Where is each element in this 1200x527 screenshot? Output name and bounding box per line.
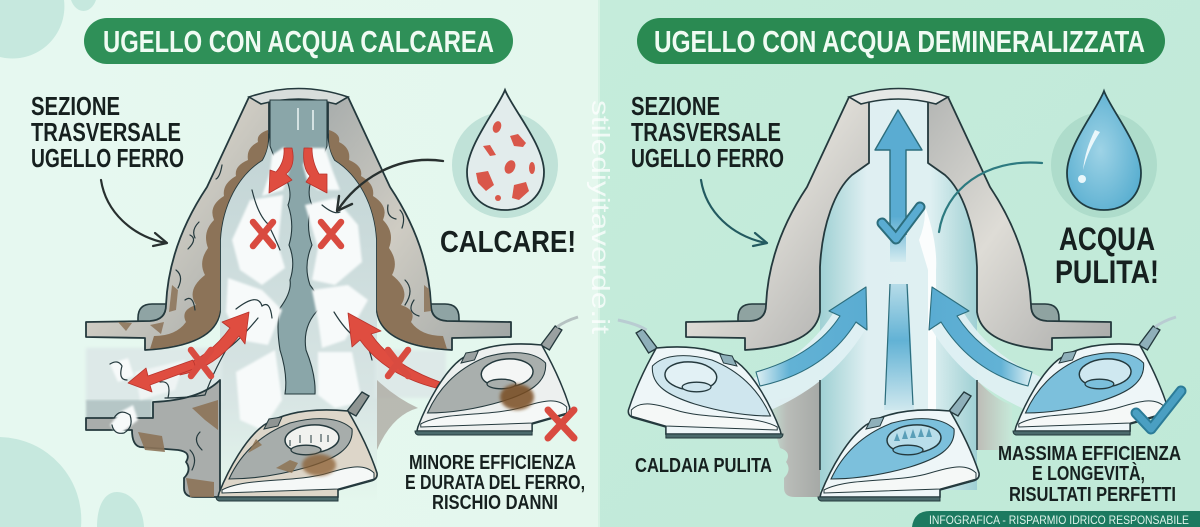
chamber with limescale (220, 100, 377, 500)
text: massima efficienza (998, 443, 1181, 506)
rust deposits left (150, 130, 268, 349)
arrow: right flow (929, 287, 1032, 386)
text: minore efficienza: MINORE EFFICIENZA (409, 452, 576, 474)
shoulders (138, 304, 459, 322)
label: calcare: CALCARE! (440, 224, 576, 259)
panel: acqua demineralizzata background (600, 0, 1200, 527)
watermark: stilediyitaverde.it (586, 100, 614, 334)
lower right wall (377, 380, 418, 450)
limescale cracks (110, 165, 419, 470)
text: minore efficienza (405, 452, 585, 514)
icon: limescale water drop (452, 90, 558, 218)
text: massima efficienza: E LONGEVITÀ, (1032, 462, 1145, 485)
lower bar edges (885, 284, 913, 405)
side channels (86, 348, 446, 402)
label: sezione trasversale destra: SEZIONE (631, 91, 720, 121)
wall lines (820, 380, 977, 470)
arrow: drop to limescale (337, 160, 443, 211)
label: sezione trasversale destra: TRASVERSALE (631, 117, 781, 147)
label: acqua pulita: PULITA! (1055, 254, 1159, 290)
arrow: sezione to nozzle right (701, 180, 767, 246)
lower left wall (765, 380, 820, 497)
nozzle left body (686, 97, 869, 350)
heading: ugello con acqua calcarea: UGELLO CON ACQUA CALCAREA (103, 24, 494, 59)
iron: left panel rusted right (415, 317, 578, 435)
nozzle diagram: acqua calcarea (86, 88, 511, 500)
nozzle diagram: acqua demineralizzata (686, 88, 1111, 497)
label: sezione trasversale sinistra: UGELLO FERRO (31, 143, 184, 173)
icon: clean water drop (1051, 91, 1157, 218)
nozzle cap (849, 88, 948, 104)
rust deposits right (329, 130, 447, 349)
icon: blue check (1136, 391, 1181, 429)
iron: right panel clean left (618, 320, 783, 438)
text: minore efficienza: RISCHIO DANNI (432, 492, 558, 514)
icon: red cross (548, 410, 574, 438)
arrow: sezione to nozzle left (101, 180, 167, 246)
heading: ugello con acqua calcarea (84, 18, 513, 64)
iron: right panel clean right (1013, 317, 1176, 435)
neck highlights (298, 108, 313, 130)
label: sezione trasversale destra: UGELLO FERRO (631, 143, 784, 173)
nozzle right body (928, 97, 1111, 350)
arrow: left flow (756, 287, 867, 386)
iron: right panel clean centre (818, 392, 979, 501)
lower right wall (977, 380, 1012, 450)
decorative bubbles (0, 0, 144, 527)
nozzle right body (328, 97, 511, 350)
label: sezione trasversale sinistra: SEZIONE (31, 91, 120, 121)
label: acqua pulita (1055, 221, 1159, 290)
label: sezione trasversale sinistra (31, 91, 184, 173)
clean chamber (820, 100, 977, 490)
red flow arrows (128, 148, 440, 392)
red crosses (191, 222, 408, 376)
line: drop to chamber (939, 162, 1042, 232)
iron: left panel dirty centre (216, 392, 377, 501)
central channel (270, 100, 327, 394)
text: minore efficienza: E DURATA DEL FERRO, (405, 472, 585, 494)
nozzle left body (86, 97, 269, 350)
lower rust (138, 400, 218, 497)
rust patches (118, 285, 431, 334)
label: caldaia pulita: CALDAIA PULITA (635, 455, 772, 477)
lower walls (86, 380, 220, 497)
lower flange shade (86, 400, 152, 420)
panel: acqua calcarea background (0, 0, 598, 527)
arrow: upward and tick (875, 110, 922, 262)
lower central bar (884, 284, 914, 410)
label: sezione trasversale destra (631, 91, 784, 173)
shoulders (738, 304, 1059, 322)
side flow glow (760, 320, 1037, 395)
label: acqua pulita: ACQUA (1059, 221, 1155, 257)
white highlight (919, 198, 936, 410)
nozzle cap (249, 88, 348, 104)
label: sezione trasversale sinistra: TRASVERSALE (31, 117, 181, 147)
limescale blobs (110, 147, 368, 436)
